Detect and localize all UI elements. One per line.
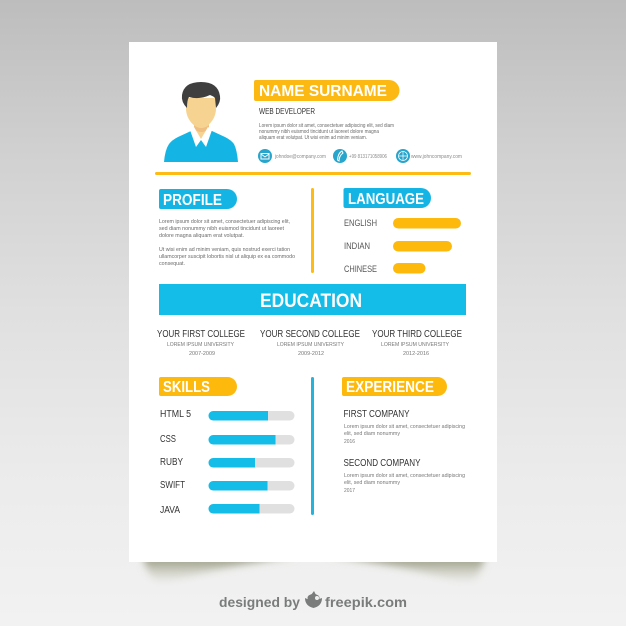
heading: skills: SKILLS — [163, 379, 210, 396]
panel: education — [157, 284, 466, 357]
footer credit: designed by — [219, 594, 300, 610]
footer credit — [219, 591, 407, 610]
profile text: sed diam nonummy nibh euismod tincidunt ut laoreet — [159, 226, 284, 232]
education banner: EDUCATION — [260, 291, 362, 312]
contact: website — [396, 149, 462, 163]
contact: phone — [333, 149, 387, 163]
college three: YOUR THIRD COLLEGE — [372, 329, 462, 340]
panel: profile — [159, 189, 295, 267]
job two: elit, sed diam nonummy — [344, 480, 400, 486]
job two — [344, 458, 465, 494]
header section — [164, 80, 462, 163]
skill: ruby: RUBY — [160, 457, 183, 468]
college three: LOREM IPSUM UNIVERSITY — [381, 342, 449, 348]
job one — [344, 409, 465, 445]
college one — [157, 329, 245, 357]
name banner: NAME SURNAME — [259, 83, 387, 100]
education banner — [159, 284, 466, 315]
icon: person avatar — [164, 82, 238, 162]
job two: Lorem ipsum dolor sit amet, consectetuer adipiscing — [344, 473, 465, 479]
skill: html 5: HTML 5 — [160, 409, 191, 420]
profile text: ullamcorper suscipit lobortis nisl ut aliquip ex ea commodo — [159, 254, 295, 260]
job one: 2016 — [344, 439, 355, 445]
contact: website: www.johncompany.com — [410, 154, 462, 160]
footer credit: freepik.com — [325, 594, 407, 610]
language: chinese: CHINESE — [344, 264, 377, 275]
language: indian: INDIAN — [344, 241, 370, 252]
panel: skills — [159, 377, 294, 516]
college three — [372, 329, 462, 357]
profile text: Lorem ipsum dolor sit amet, consectetuer adipiscing elit, — [159, 219, 290, 225]
language: english: ENGLISH — [344, 218, 377, 229]
panel: language — [344, 188, 461, 275]
heading: experience: EXPERIENCE — [346, 379, 434, 396]
resume paper — [129, 42, 497, 562]
job one: FIRST COMPANY — [344, 409, 410, 420]
job one: elit, sed diam nonummy — [344, 431, 400, 437]
heading: language: LANGUAGE — [348, 191, 424, 208]
college three: 2012-2016 — [403, 351, 429, 357]
job two: SECOND COMPANY — [344, 458, 421, 469]
job two: 2017 — [344, 488, 355, 494]
job title: WEB DEVELOPER — [259, 106, 315, 116]
contact: phone: +99 813171058906 — [349, 154, 387, 160]
college one: 2007-2009 — [189, 351, 215, 357]
college two: LOREM IPSUM UNIVERSITY — [277, 342, 344, 348]
contact: email — [258, 149, 326, 163]
skill: java: JAVA — [160, 505, 180, 516]
college one: LOREM IPSUM UNIVERSITY — [167, 342, 234, 348]
college two: 2009-2012 — [298, 351, 324, 357]
profile text: Ut wisi enim ad minim veniam, quis nostrud exerci tation — [159, 247, 290, 253]
intro text: nonummy nibh euismod tincidunt ut laoreet dolore magna — [259, 129, 380, 135]
panel: experience — [342, 377, 465, 494]
profile text: consequat. — [159, 261, 185, 267]
contact: email: johndoe@company.com — [274, 154, 326, 160]
job one: Lorem ipsum dolor sit amet, consectetuer adipiscing — [344, 424, 465, 430]
college one: YOUR FIRST COLLEGE — [157, 329, 245, 340]
intro text: aliquam erat volutpat. Ut wisi enim ad minim veniam. — [259, 135, 367, 141]
college two: YOUR SECOND COLLEGE — [260, 329, 360, 340]
heading: profile: PROFILE — [163, 192, 222, 209]
icon: freepik logo — [305, 591, 322, 608]
intro text: Lorem ipsum dolor sit amet, consectetuer adipiscing elit, sed diam — [259, 123, 394, 129]
profile text — [159, 219, 295, 267]
skill: swift: SWIFT — [160, 480, 185, 491]
skill: css: CSS — [160, 434, 176, 445]
intro text — [259, 123, 394, 141]
paper shadow — [143, 556, 485, 584]
profile text: dolore magna aliquam erat volutpat. — [159, 233, 244, 239]
college two — [260, 329, 360, 357]
